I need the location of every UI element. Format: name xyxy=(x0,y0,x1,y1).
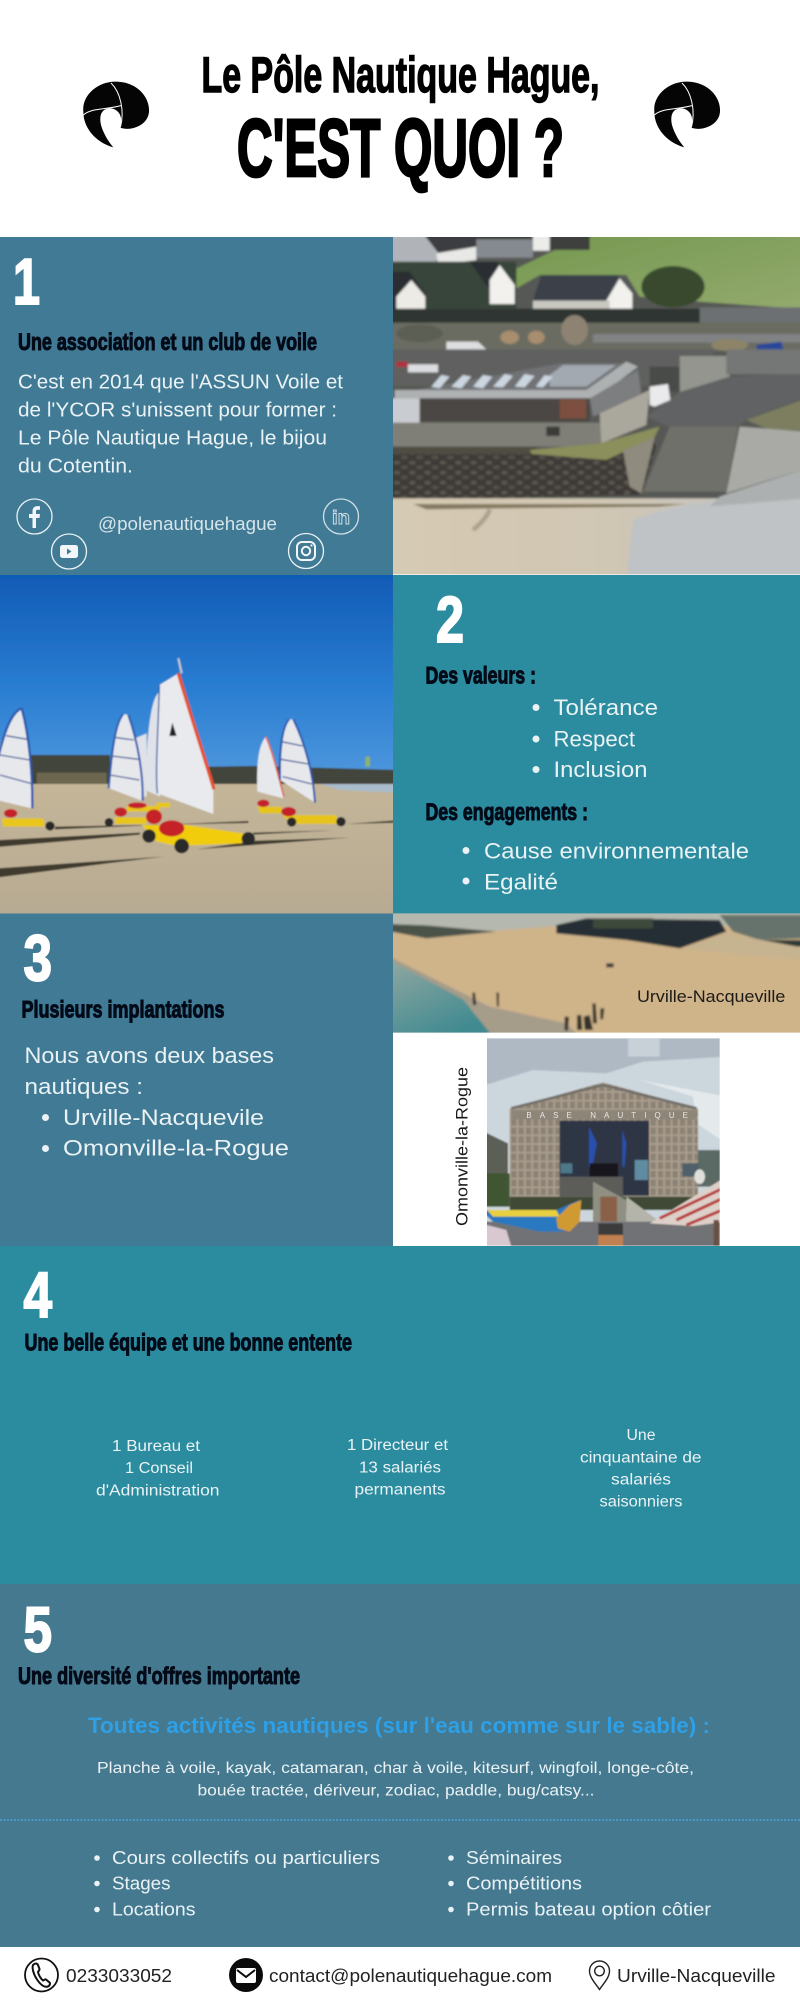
facade lettering: BASE NAUTIQUE xyxy=(526,1111,688,1120)
green strip xyxy=(386,447,536,455)
heading 3: Plusieurs implantations xyxy=(22,996,224,1024)
right landscape xyxy=(697,1149,720,1188)
panel: section 2 text xyxy=(393,575,800,914)
icon: youtube xyxy=(52,534,86,569)
sand xyxy=(393,496,718,574)
body text 3: Omonville-la-Rogue xyxy=(63,1136,289,1160)
shadows xyxy=(0,820,400,878)
team column 2: permanents xyxy=(354,1482,446,1498)
icon: linkedin: in xyxy=(332,508,350,529)
white van near building xyxy=(650,384,670,407)
email: contact@polenautiquehague.com xyxy=(269,1965,552,1986)
central house xyxy=(533,275,620,301)
left yacht xyxy=(0,708,32,808)
activities heading: Toutes activités nautiques (sur l'eau comme sur le sable) : xyxy=(88,1713,710,1738)
offers list right: Séminaires xyxy=(466,1847,562,1868)
values list: Respect xyxy=(554,726,635,752)
commitments list xyxy=(462,838,749,894)
label Omonville-la-Rogue: Omonville-la-Rogue xyxy=(452,1067,472,1226)
panel: section 3 text xyxy=(0,914,393,1246)
team column 1: 1 Conseil xyxy=(125,1460,193,1477)
green field xyxy=(506,233,800,309)
team column 2: 13 salariés xyxy=(359,1460,441,1476)
number 3: 3 xyxy=(24,922,52,994)
team column 2 xyxy=(347,1437,449,1498)
heading: values: Des valeurs : xyxy=(426,662,536,690)
panel: section 1 text xyxy=(0,237,393,575)
activities list: Planche à voile, kayak, catamaran, char à voile, kitesurf, wingfoil, longe-côte, xyxy=(97,1760,694,1777)
panel: section 4 xyxy=(0,1246,800,1584)
rock wall xyxy=(393,442,656,498)
sky xyxy=(0,568,400,772)
body text 3: Nous avons deux bases xyxy=(24,1043,274,1068)
glass floor xyxy=(393,396,422,424)
team column 2: 1 Directeur et xyxy=(347,1437,449,1454)
beach xyxy=(0,784,400,917)
kite xyxy=(365,757,370,767)
icon: facebook xyxy=(17,499,52,534)
header xyxy=(83,47,720,194)
main yacht xyxy=(146,692,161,797)
body text 1: de l'YCOR s'unissent pour former : xyxy=(18,398,337,422)
values list: Inclusion xyxy=(554,757,648,782)
icon: linkedin xyxy=(324,499,358,534)
commitments list: Egalité xyxy=(484,870,558,894)
number 4: 4 xyxy=(24,1259,52,1331)
team column 1 xyxy=(96,1438,220,1500)
number 2: 2 xyxy=(436,583,464,656)
commitments list: Cause environnementale xyxy=(484,838,749,864)
sky xyxy=(487,1056,720,1222)
team column 1: 1 Bureau et xyxy=(112,1438,201,1455)
heading 1: Une association et un club de voile xyxy=(18,329,317,356)
heading 5: Une diversité d'offres importante xyxy=(18,1663,300,1690)
tree line xyxy=(30,754,393,785)
body text 3 xyxy=(24,1043,289,1160)
number 5: 5 xyxy=(24,1594,52,1666)
blue van xyxy=(756,341,784,350)
ground xyxy=(487,1220,720,1246)
activities list: bouée tractée, dériveur, zodiac, paddle, bug/catsy... xyxy=(198,1782,594,1800)
icon: instagram xyxy=(288,534,324,568)
stone base xyxy=(386,423,601,447)
footer contact bar xyxy=(25,1958,776,1992)
team column 3: Une xyxy=(626,1427,656,1444)
title line 2: C'EST QUOI ? xyxy=(237,103,564,194)
icon: location pin xyxy=(590,1961,610,1990)
icon: phone xyxy=(25,1958,58,1992)
hedge and road band xyxy=(386,309,706,324)
slipway xyxy=(643,427,738,492)
label Urville-Nacqueville: Urville-Nacqueville xyxy=(637,987,785,1006)
white panel behind Omonville photo xyxy=(393,1033,800,1246)
tree xyxy=(641,266,705,307)
offers list left: Stages xyxy=(112,1872,170,1894)
offers list left xyxy=(94,1847,380,1920)
team column 3: cinquantaine de xyxy=(580,1450,702,1466)
icon: mail xyxy=(229,1958,263,1992)
social handle: @polenautiquehague xyxy=(98,514,277,534)
team column 3: saisonniers xyxy=(600,1494,683,1510)
number 1: 1 xyxy=(13,245,40,318)
centre-left yachts xyxy=(135,733,147,797)
photo: building on the beach xyxy=(386,230,800,580)
photo: sand yachts on the beach xyxy=(0,568,400,917)
offers list right: Permis bateau option côtier xyxy=(466,1898,711,1920)
right yachts xyxy=(257,737,283,798)
offers list right xyxy=(448,1847,711,1920)
logo left xyxy=(83,82,149,147)
photo: Omonville nautical base xyxy=(487,1038,720,1246)
road xyxy=(646,373,800,427)
body text 1 xyxy=(18,370,343,478)
location: Urville-Nacqueville xyxy=(617,1965,776,1986)
team column 1: d'Administration xyxy=(96,1482,220,1500)
body text 3: nautiques : xyxy=(24,1074,143,1099)
logo right xyxy=(654,82,720,147)
values list: Tolérance xyxy=(554,695,658,720)
body text 3: Urville-Nacquevile xyxy=(63,1105,264,1130)
activities list xyxy=(97,1760,694,1800)
phone number: 0233033052 xyxy=(66,1965,172,1986)
title line 1: Le Pôle Nautique Hague, xyxy=(202,47,600,103)
top-left houses xyxy=(474,237,591,251)
planting and railings xyxy=(510,1197,710,1210)
heading 4: Une belle équipe et une bonne entente xyxy=(24,1330,352,1356)
body text 1: du Cotentin. xyxy=(18,454,133,478)
inflatable banana xyxy=(480,1200,580,1232)
offers list left: Locations xyxy=(112,1898,196,1920)
heading: commitments: Des engagements : xyxy=(426,799,588,826)
team column 3 xyxy=(580,1427,702,1510)
offers list left: Cours collectifs ou particuliers xyxy=(112,1847,380,1868)
values list xyxy=(532,695,658,782)
retaining wall xyxy=(386,349,713,386)
panel: section 5 xyxy=(0,1584,800,1947)
plinth xyxy=(598,1223,623,1235)
left trees and house xyxy=(487,1132,509,1175)
white van xyxy=(446,342,487,350)
building roof and solar panels xyxy=(422,363,621,390)
offers list right: Compétitions xyxy=(466,1872,582,1894)
team column 3: salariés xyxy=(611,1472,671,1488)
building xyxy=(510,1082,698,1197)
body text 1: Le Pôle Nautique Hague, le bijou xyxy=(18,426,327,450)
sail pile xyxy=(650,1180,720,1227)
photo: Urville-Nacqueville beach xyxy=(386,910,800,1037)
body text 1: C'est en 2014 que l'ASSUN Voile et xyxy=(18,370,343,394)
